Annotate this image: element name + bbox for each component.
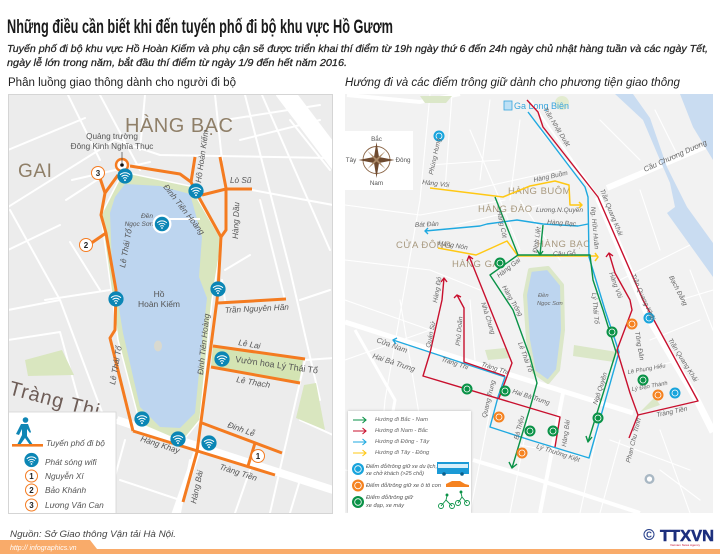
footer band [0, 540, 720, 554]
panel: vehicle map [345, 94, 713, 514]
street labels: Cửa Nam [375, 335, 409, 355]
legend: vehicle map: Điểm đỗ/trông giữ xe du lịch, [366, 463, 437, 470]
marker: Quảng trường Đông Kinh Nghĩa Thục [71, 132, 153, 171]
street labels: Tràng Thi [440, 356, 469, 372]
legend: vehicle map: xe chở khách (>25 chỗ) [365, 470, 424, 477]
street labels [371, 105, 709, 464]
numbered markers: 2 [84, 241, 89, 250]
street labels: Hàng Bài [189, 469, 205, 504]
street labels: Lê Lai [238, 338, 261, 351]
legend: vehicle map: Điểm đỗ/trông giữ xe ô tô con [366, 482, 441, 489]
street labels [107, 129, 319, 504]
street labels: Tràng Tiền [218, 462, 259, 483]
street labels: Lý Thường Kiệt [535, 443, 582, 464]
legend: pedestrian map: 2 [29, 486, 34, 495]
district labels: Tràng Thi [7, 378, 103, 423]
lake: Hoàn Kiếm [110, 184, 207, 428]
intro text: Tuyến phố đi bộ khu vực Hồ Hoàn Kiếm và phụ cận sẽ được triển khai thí điểm từ 19h ngày thứ 6 đến 24h ngày chủ nhật hàng tuần và các ngày Tết, [7, 43, 708, 55]
legend: pedestrian map [8, 412, 116, 514]
heading: left map: Phân luồng giao thông dành cho người đi bộ [8, 77, 236, 89]
intro text [7, 43, 708, 69]
street labels: Phan Chu Trinh [625, 417, 643, 463]
numbered markers: 3 [96, 169, 101, 178]
river [615, 94, 713, 277]
district labels: HÀNG BUÔM [508, 186, 571, 197]
orange walking routes [90, 157, 305, 502]
street labels: Hàng Vôi [607, 271, 623, 300]
icon: bus [437, 462, 469, 476]
park: Vườn hoa Lý Thái Tổ [211, 347, 303, 382]
legend arrows [353, 417, 366, 456]
park: lake shore [101, 172, 222, 442]
parking markers: blue [434, 130, 680, 398]
street labels: Ngô Quyền [590, 371, 609, 406]
street labels: Hàng Gai [496, 257, 523, 280]
logo: TTXVN [644, 528, 714, 547]
marker: Quảng trường Đông Kinh Nghĩa Thục: Quảng trường [86, 132, 138, 141]
street labels: Hồ Hoàn Kiếm [194, 129, 210, 183]
icon: bikes [438, 491, 470, 508]
district labels: HÀNG BẠC [537, 239, 591, 250]
street labels: Hàng Dầu [231, 201, 241, 239]
street labels: Hàng Nón [438, 240, 468, 252]
legend: vehicle map: Hướng đi Tây - Đông [375, 450, 430, 456]
street labels: Vườn hoa Lý Thái Tổ [235, 354, 319, 376]
lake: Hoàn Kiếm [525, 268, 563, 382]
street labels: Đinh Lễ [226, 419, 257, 439]
street labels: Hai Bà Trưng [371, 351, 417, 374]
street labels: Đinh Tiên Hoàng [161, 183, 207, 237]
legend: pedestrian map: 1 [29, 472, 34, 481]
district labels: GAI [18, 161, 53, 182]
compass: Đông [395, 157, 411, 164]
street labels: Lý Đạo Thành [631, 381, 668, 393]
street labels: Ngọc Sơn [537, 301, 563, 307]
street labels: Bát Đàn [415, 221, 439, 229]
street labels: Phủ Doãn [454, 316, 465, 346]
street labels: Hai Bà Trưng [511, 388, 551, 407]
compass [345, 131, 413, 190]
street labels: Cầu Chương Dương [642, 138, 709, 174]
district labels: HÀNG ĐÀO [478, 204, 533, 215]
district labels [396, 186, 591, 270]
street labels: Quang Trung [481, 379, 497, 418]
yellow routes: Tây - Đông [430, 181, 598, 261]
legend: pedestrian map: Lương Văn Can [45, 500, 104, 510]
compass: Nam [370, 180, 383, 187]
street labels: Tông Đản [633, 331, 646, 361]
street labels: Lê Thái Tổ [107, 345, 124, 385]
green routes: Bắc - Nam [490, 197, 616, 468]
lake labels: Đền [141, 211, 153, 220]
street labels: Trần Quang Khải [598, 187, 625, 237]
street labels: Hàng Cót [495, 210, 508, 240]
legend parking [352, 463, 364, 508]
street labels: Câu Gỗ [553, 248, 576, 258]
street labels: Lê Thạch [236, 375, 271, 390]
icon: walker [12, 417, 43, 447]
street labels: Trần Quang Khải [666, 336, 701, 384]
parks [420, 96, 660, 412]
street labels: Bà Triệu [513, 415, 526, 441]
street labels: Đinh Liệt [532, 225, 543, 253]
district labels: HÀNG GAI [452, 259, 502, 270]
station: Ga Long Biên: Ga Long Biên [514, 101, 569, 111]
street labels: Phùng Hưng [428, 137, 443, 175]
legend: vehicle map: Hướng đi Nam - Bắc [375, 427, 428, 434]
marker: Quảng trường Đông Kinh Nghĩa Thục: Đông Kinh Nghĩa Thục [71, 142, 153, 151]
red routes: Nam - Bắc [423, 100, 698, 447]
street labels: Hàng Khay [139, 434, 182, 456]
logo: TTXVN: Vietnam News Agency [670, 543, 700, 547]
street labels: Ng. Hữu Huân [589, 207, 600, 250]
street labels: Nhà Chung [479, 301, 496, 336]
legend: pedestrian map: Phát sóng wifi [45, 457, 98, 467]
source: Nguồn: Sở Giao thông Vận tải Hà Nội. [10, 529, 176, 540]
lake labels [125, 211, 180, 309]
street labels: Đinh Tiên Hoàng [196, 313, 211, 375]
street labels: Lương.N.Quyền [536, 205, 583, 214]
compass: Tây [346, 157, 357, 164]
grey location marker [646, 475, 653, 483]
street labels: Đền [538, 293, 549, 299]
legend: vehicle map [348, 411, 471, 513]
lake labels: Ngọc Sơn [125, 221, 154, 228]
street labels: Lý Thái Tổ [590, 292, 601, 325]
legend: vehicle map: Hướng đi Đông - Tây [375, 439, 430, 445]
logo: TTXVN: TTXVN [660, 528, 714, 545]
footer url: http:// infographics.vn [10, 545, 77, 552]
street labels: Hàng Bạc [547, 219, 577, 228]
park: small gardens [25, 350, 325, 430]
street labels: Tràng Thi [480, 361, 509, 377]
logo: TTXVN: C [646, 530, 652, 540]
street labels: Quán Sứ [425, 320, 438, 348]
intro text: ngày lễ lớn trong năm, bắt đầu thí điểm từ ngày 1/9 đến hết năm 2016. [7, 56, 347, 69]
wifi hotspots [108, 168, 230, 451]
street labels: Tràng Tiền [656, 404, 688, 419]
street labels: Trần Nguyên Hãn [225, 303, 289, 315]
legend: vehicle map: Điểm đỗ/trông giữ [366, 494, 414, 501]
street labels: Lê Thái Tổ [117, 228, 134, 268]
street labels: Hàng Buồm [533, 168, 569, 184]
legend: pedestrian map: Bảo Khánh [45, 485, 86, 495]
panel: pedestrian map [7, 90, 340, 514]
blue routes: Đông - Tây [393, 112, 619, 458]
title: Những điều cần biết khi đến tuyến phố đi bộ khu vực Hồ Gươm [7, 16, 393, 38]
numbered markers [80, 166, 264, 462]
legend: vehicle map: Hướng đi Bắc - Nam [375, 416, 428, 423]
compass: Bắc [371, 134, 382, 143]
legend: pedestrian map: 3 [29, 501, 34, 510]
legend: vehicle map: xe đạp, xe máy [365, 503, 405, 509]
street labels: Hàng Đỏ [431, 276, 444, 303]
lake labels: Hoàn Kiếm [138, 299, 180, 309]
legend: pedestrian map: Tuyến phố đi bộ [46, 438, 105, 448]
street labels: Lê Phụng Hiểu [627, 362, 667, 376]
street labels: Hàng Trống [500, 284, 525, 318]
street labels: Hàng Vôi [422, 179, 450, 189]
street labels: Hàng Bài [561, 419, 572, 447]
street labels: Trần Quang Khải [629, 272, 658, 322]
icon: car [446, 481, 469, 487]
district labels: CỬA ĐÔNG [396, 239, 452, 251]
district labels [7, 114, 233, 423]
heading: right map: Hướng đi và các điểm trông giữ dành cho phương tiện giao thông [345, 77, 681, 89]
street labels: Bạch Đằng [667, 274, 690, 307]
parking markers: orange [494, 318, 664, 458]
numbered markers: 1 [256, 452, 261, 461]
parking markers: green [462, 258, 648, 436]
district labels: HÀNG BẠC [125, 114, 233, 137]
street labels: Lò Sũ [230, 176, 252, 185]
lake labels: Hồ [154, 289, 165, 299]
legend: pedestrian map: Nguyễn Xí [45, 471, 84, 481]
street labels: Trần Nhật Duật [541, 105, 573, 149]
street labels: Lê Thái Tổ [516, 341, 535, 374]
